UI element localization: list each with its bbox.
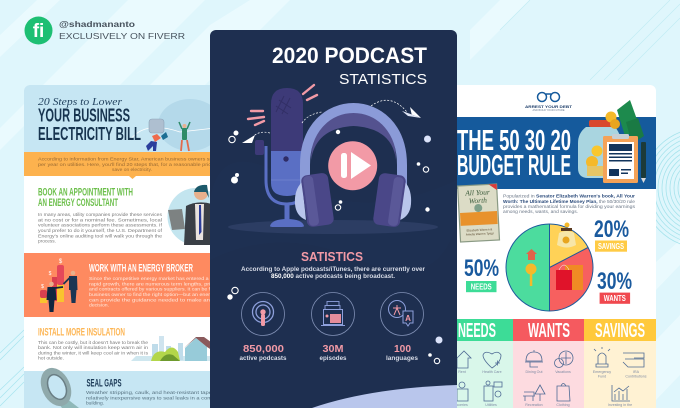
stat: languages: languages: [386, 356, 419, 362]
section: energy consultant: process.: [38, 238, 56, 244]
section: install insulation: [38, 327, 215, 361]
section: install insulation: INSTALL MORE INSULATION: [38, 327, 125, 339]
illustration: money jar and clipboard: [578, 100, 646, 183]
header: [24, 85, 222, 152]
illustration: coins and two people: $: [41, 284, 44, 290]
section: install insulation: during the winter, it will keep cool air in when it is: [38, 350, 149, 356]
section: energy consultant: [38, 185, 224, 245]
icon: podcast: [252, 302, 274, 326]
section: energy broker: [24, 253, 215, 317]
intro paragraph: provides a mathematical formula for dividing your earnings: [503, 204, 636, 209]
stat: episodes: 30M: [322, 344, 344, 355]
intro band: According to information from Energy Star, American business owners spend $: [38, 156, 227, 162]
section: seal gaps: building.: [86, 400, 104, 406]
icon: savings jar: [557, 222, 576, 248]
intro band: per year on utilities. Here, you'll find 20 steps that, for a reasonable price, can: [38, 162, 227, 167]
section: energy consultant: Energy's online auditing tool will walk you through the: [38, 233, 163, 238]
section: energy broker: rapid growth, there are numerous term lengths, pric: [89, 281, 214, 286]
seller handle: EXCLUSIVELY ON FIVERR: [59, 32, 185, 41]
seller handle: [59, 19, 185, 41]
icon: ira contributions: Contributions: [625, 374, 647, 378]
illustration: headphones: [295, 108, 411, 228]
header: YOUR BUSINESS: [38, 105, 130, 126]
stat: active podcasts: active podcasts: [240, 356, 287, 362]
dashed arrows: [242, 100, 421, 143]
icon: clothing: Clothing: [556, 403, 570, 407]
intro band: save on electricity.: [112, 167, 152, 172]
icon: translation bubbles: A: [405, 314, 411, 323]
illustration: tape roll: [35, 363, 79, 408]
section: seal gaps: SEAL GAPS: [86, 378, 122, 390]
illustration: skyline and house: [131, 336, 215, 361]
panel: podcast statistics infographic: [210, 30, 457, 408]
bottom wave: [312, 385, 457, 408]
intro paragraph: among needs, wants, and savings.: [503, 209, 578, 214]
icon: recreation: Recreation: [525, 403, 543, 407]
section: install insulation: This can be costly, but it doesn't have to break the: [38, 340, 149, 345]
stats description: 850,000 active podcasts being broadcast.: [271, 274, 395, 280]
stat: 50 percent needs: [464, 255, 499, 292]
section: energy consultant: In many areas, utility companies provide these services: [38, 212, 163, 217]
intro band: [24, 152, 227, 179]
icon: ira contributions: IRA: [633, 370, 640, 374]
stat: languages: 100: [394, 344, 411, 355]
stats description: [241, 267, 426, 280]
section: energy broker: business owner to find the right option—but an energ: [89, 292, 214, 297]
book cover: Elizabeth Warren &: [466, 227, 492, 233]
stats description: According to Apple podcasts/iTunes, there are currently over: [241, 267, 426, 273]
icon: emergency siren: Emergency: [593, 370, 611, 374]
intro paragraph: Popularized in Senator Elizabeth Warren's book, All Your: [503, 194, 635, 198]
illustration: coins and two people: $: [59, 259, 63, 265]
illustration: people with plug: [146, 119, 190, 151]
icon: play button: [328, 141, 377, 190]
section: energy broker: and contracts offered by various suppliers. It can be fo: [89, 287, 214, 292]
stat: languages: [380, 292, 424, 362]
illustration: consultant: [168, 185, 224, 245]
stat: 20 percent savings: 20%: [594, 216, 629, 243]
section: energy consultant: volunteer associations perform these assessments. If: [38, 223, 163, 228]
icon: shopping bags: [556, 265, 583, 290]
icon: vacations: Vacations: [555, 370, 571, 374]
stat: 50 percent needs: NEEDS: [471, 282, 492, 292]
column: wants: WANTS: [528, 320, 570, 342]
header: ELECTRICITY BILL: [38, 123, 141, 144]
illustration ground: [228, 220, 438, 234]
stat: 20 percent savings: SAVINGS: [598, 242, 624, 251]
panel: budget rule infographic: [450, 85, 656, 408]
title band: THE 50 30 20: [457, 125, 571, 157]
column: wants: [513, 319, 584, 408]
title: [272, 43, 428, 88]
section: seal gaps: relatively inexpensive ways to seal leaks in a com: [86, 395, 212, 400]
icon: rent: Rent: [458, 370, 466, 374]
column: savings: [584, 319, 656, 408]
stat: 30 percent wants: 30%: [597, 268, 632, 295]
title: STATISTICS: [339, 71, 427, 88]
column: needs: [450, 319, 513, 408]
icon: file box: [321, 302, 345, 326]
stat: 30 percent wants: [597, 268, 632, 304]
title: 2020 PODCAST: [272, 43, 428, 68]
intro paragraph: [503, 194, 636, 214]
icon: investing: Investing in the: [608, 403, 632, 407]
section: install insulation: hot outside.: [38, 356, 64, 361]
icon: dining out: Dining Out: [526, 370, 542, 374]
icon: fiverr logo: fi: [33, 21, 44, 42]
stat: episodes: episodes: [320, 356, 347, 362]
section: energy consultant: AN ENERGY CONSULTANT: [38, 197, 118, 209]
section: seal gaps: [24, 363, 215, 408]
stat: 50 percent needs: 50%: [464, 255, 499, 282]
logo: arrest your debt: [525, 92, 573, 112]
title band: BUDGET RULE: [457, 150, 571, 182]
book cover: Amelia Warren Tyagi: [466, 231, 494, 237]
title band: [450, 117, 656, 189]
section: energy broker: can provide the guidance needed to make an i: [89, 297, 213, 302]
book cover: [458, 184, 499, 242]
pie chart: [506, 222, 593, 311]
book cover: Worth: [469, 196, 487, 205]
intro paragraph: Worth: The Ultimate Lifetime Money Plan, the 50/30/20 rule: [503, 199, 636, 204]
icon: utilities: Utilities: [485, 403, 497, 407]
icon: fiverr logo: [24, 16, 52, 44]
stat: active podcasts: [240, 292, 287, 362]
icon: house key: [526, 249, 537, 286]
section: energy consultant: you'd prefer to do it yourself, the U.S. Department of: [38, 228, 163, 233]
panel: electricity bill infographic: [24, 85, 227, 408]
seller handle: @shadmananto: [59, 19, 135, 29]
stat: episodes: [312, 292, 354, 362]
decorative dots: [227, 130, 442, 364]
stat: 20 percent savings: [594, 216, 629, 252]
section: energy broker: Since the competitive energy market has entered a p: [89, 276, 214, 281]
stat: 30 percent wants: WANTS: [604, 294, 626, 303]
section: seal gaps: Weather stripping, caulk, and heat-resistant tape: [86, 390, 213, 395]
header: 20 Steps to Lower: [38, 96, 123, 108]
section: energy consultant: at no cost or for a nominal fee. Sometimes, local: [38, 217, 162, 222]
column: needs: NEEDS: [458, 320, 496, 342]
icon: emergency siren: [593, 347, 611, 378]
icon: health care: Health Care: [482, 370, 502, 374]
section: energy broker: WORK WITH AN ENERGY BROKER: [89, 263, 193, 275]
logo: arrest your debt: AND BUILD YOUR FUTURE: [532, 109, 565, 112]
sound marks: [248, 85, 317, 125]
stat: active podcasts: 850,000: [243, 344, 284, 355]
icon: emergency siren: Fund: [598, 374, 606, 378]
logo: arrest your debt: ARREST YOUR DEBT: [525, 104, 573, 109]
icon: groceries: Groceries: [452, 403, 468, 407]
illustration: coins and two people: [40, 259, 78, 312]
section: energy consultant: BOOK AN APPOINTMENT WITH: [38, 186, 133, 198]
icon: ira contributions: [623, 353, 647, 378]
section: install insulation: bank. Not only will insulation keep warm air in: [38, 345, 149, 350]
illustration: coins and two people: $: [49, 271, 52, 277]
book cover: All Your: [464, 187, 490, 198]
heading: satistics: SATISTICS: [301, 250, 363, 264]
section: energy broker: decision.: [89, 303, 109, 308]
illustration: microphone: [255, 88, 307, 227]
